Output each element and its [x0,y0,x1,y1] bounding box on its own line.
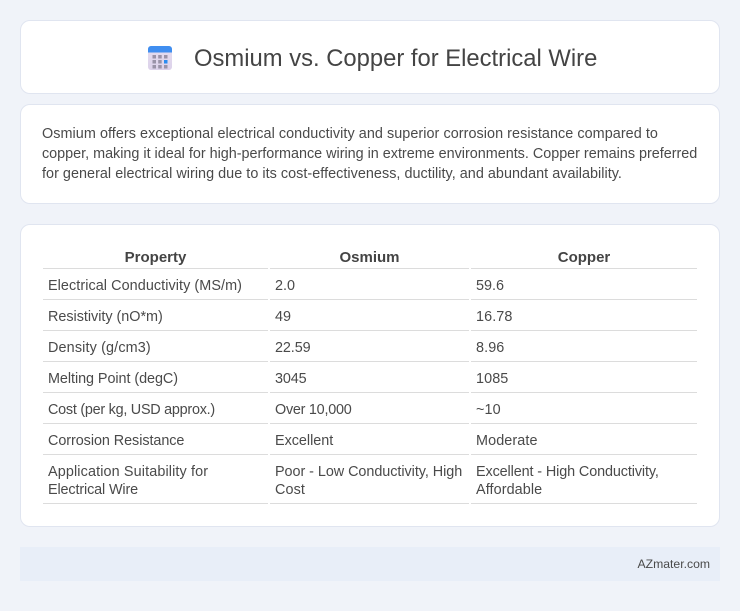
title: Osmium vs. Copper for Electrical Wire [194,45,597,72]
table content: 16.78 [476,309,513,325]
intro paragraph: for general electrical wiring due to its cost-effectiveness, ductility, and abundant availability. [42,166,622,182]
table content: Affordable [476,482,542,498]
table content: Moderate [476,433,538,449]
table content: 2.0 [275,278,295,294]
intro text panel [20,104,720,204]
table content: Over 10,000 [275,402,351,418]
header: osmium: Osmium [339,249,400,266]
row: application suitability: Electrical Wire [48,482,138,498]
table content: 22.59 [275,340,311,356]
row: application suitability: Application Suitability for [48,464,208,480]
icon: calendar [148,46,172,70]
row: density: Density (g/cm3) [48,340,151,356]
row: cost: Cost (per kg, USD approx.) [48,402,215,418]
intro paragraph: copper, making it ideal for high-performance wiring in extreme environments. Copper remains preferred [42,146,697,162]
intro paragraph [42,126,697,182]
row: resistivity: Resistivity (nO*m) [48,309,163,325]
table content: 1085 [476,371,508,387]
title card [20,20,720,94]
header: copper: Copper [558,249,610,266]
footer credit: AZmater.com [638,557,710,571]
table content: Poor - Low Conductivity, High [275,464,462,480]
row: corrosion resistance: Corrosion Resistance [48,433,184,449]
row: application suitability [48,464,208,498]
table content: Excellent - High Conductivity, [476,464,659,480]
table content: Cost [275,482,305,498]
row: conductivity: Electrical Conductivity (MS/m) [48,278,242,294]
table content: 59.6 [476,278,504,294]
table content: 3045 [275,371,307,387]
panel: comparison table [20,224,720,527]
row: melting point: Melting Point (degC) [48,371,178,387]
table content: 49 [275,309,291,325]
footer bar [20,547,720,581]
table content: ~10 [476,402,501,418]
table content: 8.96 [476,340,504,356]
table content: Excellent [275,433,333,449]
header: property: Property [125,249,186,266]
intro paragraph: Osmium offers exceptional electrical conductivity and superior corrosion resistance compared to [42,126,658,142]
